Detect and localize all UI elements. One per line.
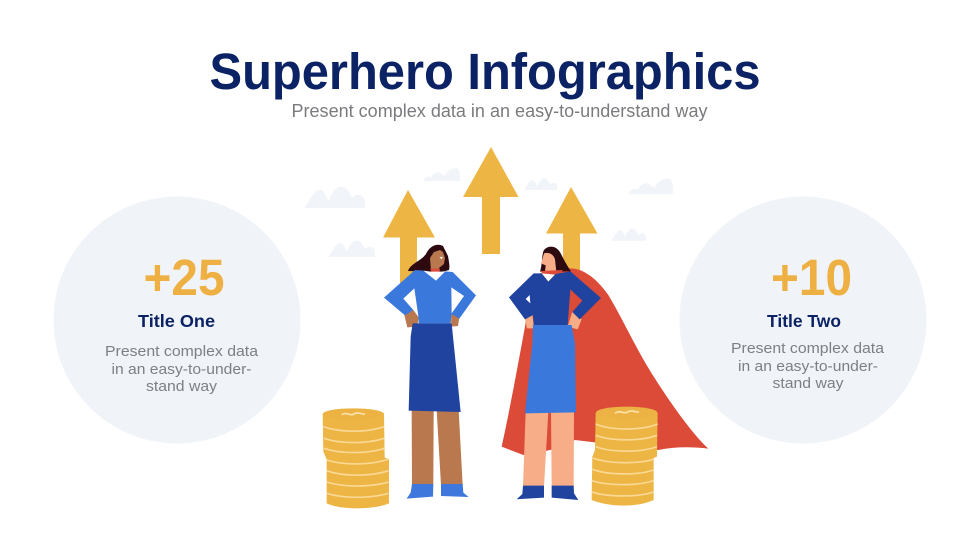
- dollar symbol: [342, 413, 365, 415]
- title: Superhero Infographics: [210, 43, 760, 100]
- woman right: [509, 247, 601, 500]
- hands: [525, 312, 582, 329]
- coin stack right: [592, 407, 658, 506]
- panel background circle left: [54, 196, 300, 444]
- body text left: stand way: [146, 378, 218, 395]
- arrow: left: [383, 190, 435, 290]
- arm gap: [526, 295, 530, 303]
- body text left: [105, 343, 259, 395]
- hair: [408, 245, 449, 272]
- arrows: [383, 147, 598, 290]
- legs: [412, 410, 463, 485]
- subtitle: Present complex data in an easy-to-understand way: [292, 101, 708, 121]
- collar: [542, 273, 555, 282]
- panel background circle right: [680, 196, 926, 444]
- arm gaps: [403, 287, 464, 316]
- dollar symbol: [615, 411, 639, 413]
- woman left: [384, 245, 476, 499]
- hands: [404, 310, 459, 327]
- body text left: Present complex data: [105, 343, 259, 360]
- face: [430, 250, 445, 272]
- skirt: [525, 325, 576, 413]
- clouds: [304, 168, 673, 257]
- heading: title one: Title One: [138, 311, 215, 331]
- scarf: [540, 270, 563, 276]
- shoes: [517, 486, 578, 500]
- stat: +25: +25: [144, 249, 224, 306]
- panel: title one: [54, 196, 300, 444]
- panel: title two: [680, 196, 926, 444]
- body text right: stand way: [772, 375, 844, 392]
- neck scarf: [430, 269, 440, 275]
- hair: [540, 247, 571, 272]
- body text right: Present complex data: [731, 340, 885, 357]
- skirt: [409, 323, 461, 412]
- body text left: in an easy-to-under-: [112, 361, 252, 378]
- stat: +10: +10: [771, 249, 852, 306]
- shoes: [407, 484, 469, 499]
- coin stack left: [323, 408, 389, 508]
- cape: [502, 268, 708, 455]
- collar: [423, 271, 445, 281]
- coin top: [323, 408, 384, 420]
- smile: [439, 257, 443, 259]
- arrow: centre: [463, 147, 518, 254]
- face: [541, 253, 556, 272]
- legs: [523, 412, 574, 487]
- body text right: in an easy-to-under-: [738, 358, 878, 375]
- coin top: [596, 407, 657, 419]
- heading: title two: Title Two: [767, 311, 841, 331]
- arrow: right: [546, 187, 598, 280]
- sweater: [509, 271, 601, 325]
- sweater: [384, 270, 476, 323]
- body text right: [731, 340, 885, 392]
